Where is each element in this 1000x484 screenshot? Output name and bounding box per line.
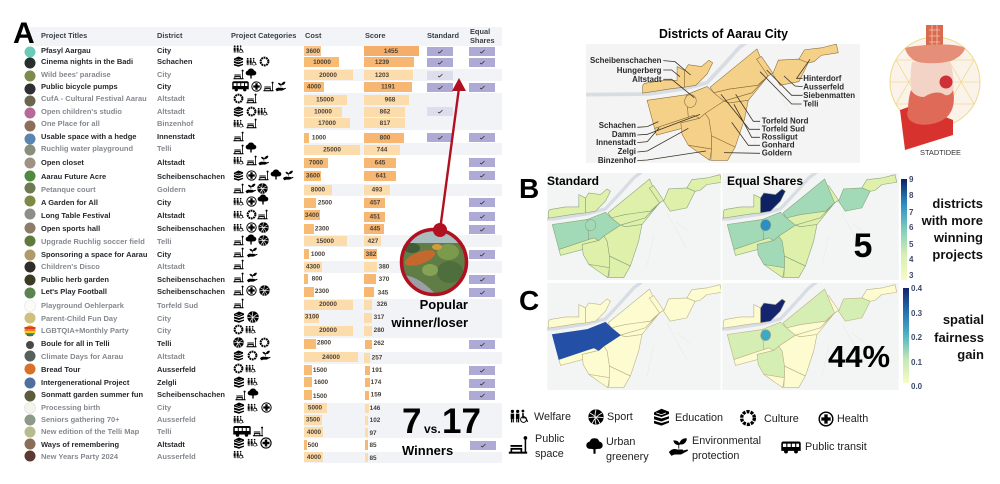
row: Petanque court — [24, 182, 390, 195]
row: Sponsoring a space for Aarau: City — [157, 250, 172, 259]
row: Let's Play Football: 345 — [378, 290, 389, 296]
row: New Years Party 2024: Ausserfeld — [157, 452, 196, 461]
legend: project categories — [509, 409, 868, 463]
row: Public bicycle pumps: 4000 — [307, 84, 322, 90]
row: Intergenerational Project: Intergenerational Project — [41, 378, 130, 387]
row: Public herb garden — [24, 273, 495, 286]
row: Children's Disco: 380 — [379, 264, 390, 270]
legend item: Education — [654, 409, 723, 426]
legend item: Public space — [509, 433, 565, 460]
row: Petanque court: Petanque court — [41, 185, 96, 194]
row: Children's Disco: 4300 — [306, 264, 321, 270]
row: Parent-Child Fun Day: Parent-Child Fun Day — [41, 314, 118, 323]
row: Aarau Future Acre: 641 — [376, 172, 387, 180]
map: districts of Aarau: Damm — [612, 130, 636, 139]
row: Public herb garden: 370 — [379, 276, 390, 283]
row: Petanque court: 8000 — [311, 186, 326, 194]
colour bar B: 7 — [909, 208, 914, 217]
row: One Place for all: 17000 — [318, 120, 336, 127]
row: New edition of the Telli Map: Telli — [157, 427, 171, 436]
legend item: Public space: space — [535, 448, 564, 460]
row: Aarau Future Acre: Aarau Future Acre — [41, 172, 106, 181]
row: Open sports hall: 2300 — [315, 226, 330, 232]
row: Parent-Child Fun Day: 3100 — [305, 314, 320, 320]
row: Ruchlig water playground: 25000 — [323, 146, 341, 154]
row: Wild bees' paradise — [24, 68, 453, 82]
row: Open children's studio — [24, 106, 453, 118]
colour bar B: 5 — [909, 240, 914, 249]
colour bar B: 9 — [909, 175, 914, 184]
table header: Standard — [427, 31, 460, 40]
row: New Years Party 2024: New Years Party 2024 — [41, 452, 119, 461]
row: Sonmatt garden summer fun: 159 — [371, 392, 382, 398]
row: New edition of the Telli Map — [24, 426, 377, 438]
table header: Project Categories — [231, 31, 296, 40]
colour bar B: 8 — [909, 191, 914, 200]
row: Public bicycle pumps: 1191 — [381, 84, 395, 90]
row: Aarau Future Acre: Scheibenschachen — [157, 172, 225, 181]
row: Cinema nights in the Badi — [24, 56, 495, 68]
row: Usable space with a hedge: Innenstadt — [157, 132, 195, 141]
row: Boule for all in Telli — [26, 337, 495, 349]
row: Open closet: 645 — [375, 160, 386, 166]
metric: spatial fairness gain: 44% — [828, 339, 890, 374]
row: Playground Oehlerpark: Playground Oehlerpark — [41, 301, 125, 310]
row: Sonmatt garden summer fun: Sonmatt garden summer fun — [41, 390, 144, 399]
row: Wild bees' paradise: Wild bees' paradise — [41, 70, 111, 79]
colour bar C: 0.3 — [911, 309, 923, 318]
table header: Project Titles — [41, 31, 87, 40]
row: Intergenerational Project — [24, 376, 495, 388]
row: Public herb garden: 800 — [312, 276, 323, 282]
row: LGBTQIA+Monthly Party: City — [157, 326, 172, 335]
legend item: Public transit — [781, 441, 867, 453]
table header: Cost — [305, 31, 322, 40]
row: Open sports hall: Scheibenschachen — [157, 224, 225, 233]
row: LGBTQIA+Monthly Party: LGBTQIA+Monthly Party — [41, 326, 130, 335]
row: Seniors gathering 70+: Seniors gathering 70+ — [41, 415, 120, 424]
row: Boule for all in Telli: 2800 — [317, 340, 332, 346]
row: Let's Play Football — [24, 285, 495, 298]
legend item: Urban greenery — [586, 436, 649, 463]
row: Playground Oehlerpark: Torfeld Sud — [157, 301, 199, 310]
metric: districts with more winning projects: districts — [932, 196, 983, 211]
row: Intergenerational Project: Zelgli — [157, 378, 177, 387]
legend item: Environmental protection: Environmental — [692, 435, 761, 447]
row: Usable space with a hedge — [24, 132, 495, 144]
row: A Garden for All — [24, 194, 495, 208]
row: Open children's studio: Open children's studio — [41, 107, 122, 116]
row: Climate Days for Aarau: Climate Days for Aarau — [41, 352, 124, 361]
metric: districts with more winning projects: winning — [933, 230, 983, 245]
row: Long Table Festival: 3400 — [305, 212, 320, 219]
legend item: Health — [819, 412, 868, 426]
panel letter B: B — [519, 173, 539, 204]
map: districts of Aarau: Torfeld Nord — [762, 116, 809, 126]
colour bar C: 0.1 — [911, 358, 923, 367]
row: Seniors gathering 70+: 102 — [370, 417, 381, 424]
map: districts of Aarau: Zelgi — [618, 147, 636, 156]
label: Standard (B): Standard — [547, 174, 599, 188]
row: Processing birth: 5000 — [308, 404, 323, 412]
row: New edition of the Telli Map: 4000 — [307, 429, 322, 436]
row: Let's Play Football: 2300 — [315, 288, 330, 295]
row: LGBTQIA+Monthly Party — [24, 326, 385, 336]
legend item: Education: Education — [675, 412, 723, 424]
row: Processing birth — [24, 402, 381, 414]
row: Ways of remembering: 85 — [369, 442, 377, 449]
metric: spatial fairness gain: fairness — [934, 330, 984, 345]
row: Open closet: Altstadt — [157, 158, 185, 167]
map: B Standard — [497, 168, 722, 280]
row: CufA - Cultural Festival Aarau: 15000 — [316, 96, 334, 104]
row: Cinema nights in the Badi: Cinema nights in the Badi — [41, 57, 133, 66]
row: Cinema nights in the Badi: 1239 — [375, 59, 390, 66]
row: Bread Tour — [24, 364, 495, 375]
winners comparison: vs. — [424, 422, 441, 436]
row: Processing birth: Processing birth — [41, 403, 101, 412]
row: Pfasyl Aargau: 3600 — [306, 48, 321, 55]
row: Public bicycle pumps — [24, 81, 495, 94]
row: Pfasyl Aargau: City — [157, 46, 172, 55]
row: Parent-Child Fun Day: 317 — [374, 314, 385, 321]
row: Ruchlig water playground — [24, 142, 400, 156]
map: districts of Aarau: Hinterdorf — [803, 74, 842, 83]
row: Wild bees' paradise: 1203 — [375, 72, 390, 79]
row: New Years Party 2024: 4000 — [307, 454, 322, 461]
row: Climate Days for Aarau: 257 — [372, 354, 383, 362]
map: districts of Aarau: Innenstadt — [596, 138, 636, 147]
row: Bread Tour: 191 — [372, 367, 383, 374]
metric: spatial fairness gain: gain — [957, 347, 984, 362]
map: districts of Aarau: Gonhard — [762, 140, 795, 150]
row: Petanque court: 493 — [372, 186, 383, 194]
row: Open sports hall: 445 — [370, 226, 381, 232]
row: Sponsoring a space for Aarau: 1000 — [311, 251, 326, 258]
row: One Place for all: One Place for all — [41, 119, 100, 128]
panel letter A: A — [13, 17, 35, 50]
map: districts of Aarau: Ausserfeld — [803, 82, 844, 92]
row: Children's Disco: Children's Disco — [41, 262, 100, 271]
winners comparison: 7 — [402, 402, 421, 441]
row: Intergenerational Project: 174 — [371, 379, 382, 386]
legend item: Culture — [742, 412, 799, 425]
metric: districts with more winning projects: with more — [921, 213, 983, 228]
legend item: Welfare: Welfare — [534, 411, 571, 423]
row: One Place for all — [24, 118, 405, 132]
map: districts of Aarau: Siebenmatten — [803, 91, 855, 100]
row: Petanque court: Goldern — [157, 185, 186, 194]
row: Ways of remembering: Altstadt — [157, 440, 185, 449]
row: Seniors gathering 70+: Ausserfeld — [157, 415, 196, 424]
row: Ruchlig water playground: 744 — [377, 146, 388, 154]
row: CufA - Cultural Festival Aarau: CufA - Cultural Festival Aarau — [41, 94, 147, 103]
row: Let's Play Football: Scheibenschachen — [157, 287, 225, 296]
row: Open closet: 7000 — [309, 160, 324, 166]
row: Parent-Child Fun Day — [24, 311, 385, 324]
row: CufA - Cultural Festival Aarau: 968 — [385, 96, 396, 104]
logo caption: STADTIDEE — [920, 150, 961, 157]
colour bar B: 6 — [909, 223, 914, 232]
legend item: Public space: Public — [535, 433, 565, 445]
logo: Stadtidee illustration — [890, 25, 980, 150]
photo: popular winner/loser garden — [400, 223, 468, 297]
map: B Equal Shares — [672, 168, 899, 280]
row: Cinema nights in the Badi: 10000 — [313, 59, 331, 66]
row: Playground Oehlerpark: 326 — [377, 301, 388, 308]
arrow from popular project to table — [440, 78, 466, 230]
metric: districts with more winning projects: projects — [932, 247, 983, 262]
row: Climate Days for Aarau: 24000 — [322, 354, 340, 361]
row: A Garden for All: 2500 — [318, 200, 333, 206]
grey bands for projects not selected — [304, 69, 502, 463]
row: Climate Days for Aarau: Altstadt — [157, 352, 185, 361]
row: Open children's studio: 10000 — [314, 108, 332, 116]
row: Pfasyl Aargau: 1455 — [384, 48, 399, 55]
row: Boule for all in Telli: 262 — [374, 340, 385, 347]
legend item: Culture: Culture — [764, 413, 799, 425]
winners comparison: Winners — [402, 443, 453, 458]
legend item: Environmental protection — [669, 435, 761, 462]
map: C Standard — [497, 278, 722, 390]
map: districts of Aarau: Scheibenschachen — [590, 56, 662, 65]
row: Sonmatt garden summer fun — [24, 388, 495, 402]
row: Public herb garden: Public herb garden — [41, 275, 109, 284]
row: Wild bees' paradise: City — [157, 70, 172, 79]
row: Open sports hall: Open sports hall — [41, 224, 100, 233]
row: Seniors gathering 70+ — [24, 414, 381, 426]
colour bar C: 0.2 — [911, 333, 923, 342]
row: Seniors gathering 70+: 3500 — [306, 416, 321, 424]
legend item: Environmental protection: protection — [692, 450, 739, 462]
row: Upgrade Ruchlig soccer field: Telli — [157, 237, 171, 246]
row: Let's Play Football: Let's Play Football — [41, 287, 107, 296]
row: Aarau Future Acre: 3600 — [306, 172, 321, 180]
map: districts of Aarau: Rossligut — [762, 132, 798, 142]
label: Equal Shares (B): Equal Shares — [727, 174, 803, 188]
metric: districts with more winning projects — [854, 196, 983, 265]
row: Boule for all in Telli: Boule for all in Telli — [41, 339, 110, 348]
row: Aarau Future Acre — [24, 169, 495, 182]
row: A Garden for All: City — [157, 198, 172, 207]
colour bar B — [901, 175, 914, 280]
legend item: Public transit: Public transit — [805, 441, 867, 453]
row: Open children's studio: Altstadt — [157, 107, 185, 116]
row: Bread Tour: Ausserfeld — [157, 365, 196, 374]
row: Public bicycle pumps: City — [157, 82, 172, 91]
table header: District — [157, 31, 183, 40]
table header — [30, 27, 502, 46]
row: Parent-Child Fun Day: City — [157, 314, 172, 323]
map: districts of Aarau: Goldern — [762, 148, 792, 158]
map: districts of Aarau: Binzenhof — [598, 156, 636, 165]
callout: popular winner/loser: winner/loser — [390, 315, 468, 330]
row: New Years Party 2024 — [24, 450, 377, 462]
callout: popular winner/loser: Popular — [420, 297, 468, 312]
row: Ways of remembering: 500 — [308, 442, 319, 449]
panel A: project table — [24, 27, 502, 463]
row: Open closet — [24, 156, 495, 168]
row: Sponsoring a space for Aarau — [24, 248, 495, 260]
row: Boule for all in Telli: Telli — [157, 339, 171, 348]
winners comparison — [402, 402, 481, 458]
row: Intergenerational Project: 1600 — [314, 379, 329, 386]
row: One Place for all: 817 — [380, 120, 391, 127]
row: Public herb garden: Scheibenschachen — [157, 275, 225, 284]
row: Bread Tour: Bread Tour — [41, 365, 81, 374]
map: districts of Aarau: Telli — [803, 100, 819, 108]
row: LGBTQIA+Monthly Party: 20000 — [319, 327, 337, 334]
row: Processing birth: 146 — [370, 405, 381, 412]
row: Cinema nights in the Badi: Schachen — [157, 57, 193, 66]
row: Sponsoring a space for Aarau: 382 — [366, 251, 377, 258]
row: Pfasyl Aargau: Pfasyl Aargau — [41, 46, 91, 55]
row: Pfasyl Aargau — [24, 45, 495, 58]
map: districts of Aarau: Torfeld Sud — [762, 124, 805, 134]
colour bar B: 3 — [909, 271, 914, 280]
colour bar C: 0.4 — [911, 284, 923, 293]
row: Ways of remembering — [24, 438, 496, 450]
map: districts of Aarau — [585, 37, 860, 165]
row: Sonmatt garden summer fun: 1500 — [313, 393, 328, 400]
legend item: Urban greenery: greenery — [606, 451, 649, 463]
row: Usable space with a hedge: Usable space with a hedge — [41, 132, 136, 141]
metric: spatial fairness gain — [828, 312, 984, 374]
winners comparison: 17 — [442, 402, 481, 441]
row: Upgrade Ruchlig soccer field — [24, 234, 381, 246]
row: Upgrade Ruchlig soccer field: 15000 — [316, 238, 334, 245]
row: Sonmatt garden summer fun: Scheibenschachen — [157, 390, 225, 399]
table header: Equal — [470, 27, 490, 36]
map: districts of Aarau: Altstadt — [632, 75, 662, 84]
row: Long Table Festival: 451 — [370, 214, 381, 220]
row: Usable space with a hedge: 1000 — [312, 134, 327, 142]
row: One Place for all: Binzenhof — [157, 119, 194, 128]
row: Public bicycle pumps: Public bicycle pumps — [41, 82, 118, 91]
row: Open closet: Open closet — [41, 158, 84, 167]
legend item: Urban greenery: Urban — [606, 436, 635, 448]
row: A Garden for All: 457 — [370, 200, 381, 206]
row: Ruchlig water playground: Ruchlig water playground — [41, 144, 134, 153]
map: districts of Aarau: Hungerberg — [617, 66, 662, 75]
row: Wild bees' paradise: 20000 — [319, 72, 337, 79]
row: Playground Oehlerpark — [24, 299, 388, 312]
row: Climate Days for Aarau — [24, 350, 383, 363]
row: Ways of remembering: Ways of remembering — [41, 440, 119, 449]
row: CufA - Cultural Festival Aarau — [24, 94, 409, 106]
row: Upgrade Ruchlig soccer field: 427 — [368, 238, 379, 245]
row: Children's Disco — [24, 260, 390, 272]
row: New edition of the Telli Map: New edition of the Telli Map — [41, 427, 140, 436]
row: Processing birth: City — [157, 403, 172, 412]
row: CufA - Cultural Festival Aarau: Altstadt — [157, 94, 185, 103]
row: Usable space with a hedge: 800 — [380, 134, 391, 142]
colour bar C: 0.0 — [911, 382, 923, 391]
row: New Years Party 2024: 85 — [369, 455, 377, 462]
table header: Shares — [470, 36, 495, 45]
row: A Garden for All: A Garden for All — [41, 198, 98, 207]
metric: districts with more winning projects: 5 — [854, 227, 872, 265]
colour bar C — [903, 284, 923, 391]
row: Long Table Festival: Long Table Festival — [41, 211, 110, 220]
row: Long Table Festival: Altstadt — [157, 211, 185, 220]
row: Bread Tour: 1500 — [313, 367, 328, 374]
panel letter C: C — [519, 285, 539, 316]
map: C Equal Shares — [672, 278, 899, 390]
metric: spatial fairness gain: spatial — [943, 312, 984, 327]
table header: Score — [365, 31, 386, 40]
legend item: Sport — [588, 409, 633, 425]
row: Sponsoring a space for Aarau: Sponsoring a space for Aarau — [41, 250, 148, 259]
row: Upgrade Ruchlig soccer field: Upgrade Ruchlig soccer field — [41, 237, 145, 246]
legend item: Welfare — [511, 410, 571, 423]
legend item: Health: Health — [837, 413, 868, 425]
map: districts of Aarau: Schachen — [599, 121, 636, 130]
row: Children's Disco: Altstadt — [157, 262, 185, 271]
row: Ruchlig water playground: Telli — [157, 144, 171, 153]
row: Open children's studio: 862 — [380, 108, 391, 116]
heading: districts map: Districts of Aarau City — [659, 27, 788, 41]
colour bar B: 4 — [909, 255, 914, 264]
row: Long Table Festival — [24, 208, 495, 222]
row: Playground Oehlerpark: 20000 — [319, 301, 337, 308]
row: Open sports hall — [24, 222, 495, 234]
row: LGBTQIA+Monthly Party: 280 — [374, 327, 385, 334]
row: New edition of the Telli Map: 97 — [369, 430, 377, 437]
callout: popular winner/loser — [390, 297, 468, 330]
legend item: Sport: Sport — [607, 411, 633, 423]
